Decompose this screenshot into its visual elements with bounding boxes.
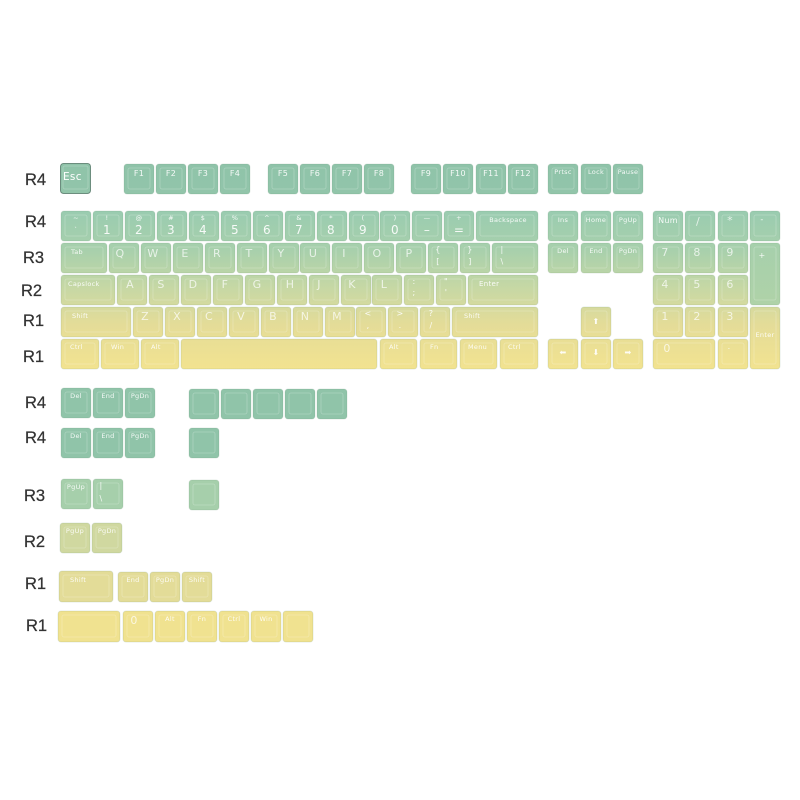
numeric keypad: 7 [661,246,669,259]
main keyboard block: A [126,278,134,291]
row labels: R4 [25,213,46,231]
main keyboard block: ; [412,288,416,297]
main keyboard block: Ctrl [70,343,83,351]
main keyboard block: > [396,309,404,318]
main keyboard block: Alt [389,343,399,351]
spare keys: R1 row one: Shift [70,576,86,584]
numeric keypad: Num [658,216,678,225]
main keyboard block: / [430,321,432,330]
main keyboard block: * [329,214,333,222]
main keyboard block: 0 [391,223,399,237]
function key row: Esc [63,171,82,183]
spare keys: R4 row two: End [101,432,115,440]
keypad plus key: + [758,251,766,260]
main keyboard block: – [424,223,430,237]
main keyboard block: ^ [264,214,270,222]
main keyboard block: Backspace [489,216,527,224]
function key row: F8 [374,169,384,178]
spare keys: R1 row one: PgDn [156,576,174,584]
main keyboard block: @ [136,214,143,222]
main keyboard block: } [467,245,473,254]
numeric keypad: 9 [726,246,734,259]
main keyboard block: H [286,278,294,291]
function key row: F11 [483,169,499,178]
spare keys: R1 row two [58,611,313,642]
main keyboard block: ? [429,309,433,318]
row labels: R1 [25,575,46,593]
main keyboard block: N [301,310,309,323]
spare keys: R1 row one [59,571,212,602]
spare keys: R1 row two: Alt [165,615,175,623]
arrow keys: ⬆ [592,317,600,326]
spare keys: R4 row two: Del [70,432,82,440]
main keyboard block: : [412,277,416,286]
main keyboard block: | [500,245,504,254]
spare keys: R1 row two: Win [259,615,273,623]
main keyboard block: 9 [359,223,367,237]
row labels: R1 [26,617,47,635]
main keyboard block: 5 [231,223,239,237]
numeric keypad: . [728,342,730,351]
navigation cluster: End [589,247,603,255]
function key row: F10 [450,169,466,178]
main keyboard block: U [309,247,317,260]
function key row: F3 [198,169,208,178]
row labels: R4 [25,394,46,412]
function key row: F2 [166,169,176,178]
row labels [21,171,47,635]
arrow keys: ⬇ [592,348,600,357]
function key row: F12 [515,169,531,178]
main keyboard block: ~ [73,214,79,222]
main keyboard block: 7 [295,223,303,237]
navigation cluster: PgDn [619,247,637,255]
spare keys: R4 row one: End [101,392,115,400]
spare keys: R4 row one: Del [70,392,82,400]
numeric keypad: 4 [661,278,669,291]
main keyboard block: R [213,247,221,260]
main keyboard block: Y [276,247,285,260]
row labels: R3 [24,487,45,505]
main keyboard block: X [173,310,181,323]
spare keys: R1 row two: 0 [130,614,138,627]
main keyboard block: L [381,278,388,291]
numeric keypad: 8 [693,246,701,259]
keypad plus key [750,243,780,305]
spare keys: R3 row: \ [100,494,102,503]
main keyboard block: I [342,247,346,260]
spare keys: R1 row two: Ctrl [228,615,240,623]
row labels: R2 [24,533,45,551]
function key row: F4 [230,169,240,178]
main keyboard block: & [296,214,302,222]
row labels: R1 [23,348,44,366]
main keyboard block: Tab [70,248,83,256]
main keyboard block: Shift [72,312,88,320]
main keyboard block: 8 [327,223,335,237]
main keyboard block: P [406,247,413,260]
row labels: R2 [21,282,42,300]
main keyboard block: + [456,214,462,222]
main keyboard block: ] [468,257,472,266]
main keyboard block: Enter [479,280,499,288]
row labels: R3 [23,249,44,267]
function key row: F5 [278,169,288,178]
main keyboard block: Shift [464,312,480,320]
navigation cluster: Home [586,216,606,224]
main keyboard block: Menu [468,343,487,351]
main keyboard block: Win [111,343,124,351]
arrow keys [548,307,643,369]
main keyboard block: E [181,247,189,260]
main keyboard block: ( [362,214,365,222]
main keyboard block: % [232,214,238,222]
spare keys: R2 row [60,523,122,553]
function key row [60,164,643,194]
function key row: Prtsc [554,168,572,176]
numeric keypad: Enter [756,331,774,339]
numeric keypad: 5 [693,278,701,291]
main keyboard block: Fn [430,343,438,351]
main keyboard block: Alt [151,343,161,351]
navigation cluster: PgUp [619,216,637,224]
spare keys: R4 row one: PgDn [131,392,149,400]
numeric keypad [653,211,780,369]
main keyboard block: C [205,310,213,323]
main keyboard block: Capslock [68,280,100,288]
navigation cluster [548,211,643,273]
main keyboard block: Q [116,247,125,260]
row labels: R4 [25,429,46,447]
main keyboard block: G [253,278,261,291]
main keyboard block: [ [436,257,440,266]
spare keys: R2 row: PgUp [66,527,84,535]
arrow keys: ⬅ [559,348,567,357]
main keyboard block: $ [201,214,205,222]
spare keys: R3 row [61,479,219,510]
main keyboard block: # [168,214,174,222]
main keyboard block: \ [500,257,504,266]
main keyboard block: 2 [135,223,143,237]
spare keys: R3 row: | [100,481,102,490]
function key row: Pause [618,168,638,176]
numeric keypad: 1 [661,310,669,323]
spare keys: R3 row: PgUp [67,483,85,491]
main keyboard block: B [269,310,277,323]
function key row: F9 [421,169,431,178]
main keyboard block: T [244,247,253,260]
function key row: F6 [310,169,320,178]
main keyboard block: Z [141,310,149,323]
numeric keypad: 2 [693,310,701,323]
main keyboard block: . [399,321,401,330]
spare keys: R4 row two [61,428,219,458]
main keyboard block: V [237,310,245,323]
main keyboard block: ` [74,226,78,234]
main keyboard block: ' [445,288,447,297]
spare keys: R1 row one: Shift [189,576,205,584]
main keyboard block: — [424,214,431,222]
numeric keypad: * [727,214,733,227]
main keyboard block: J [316,278,321,291]
numeric keypad: 3 [726,310,734,323]
function key row: F7 [342,169,352,178]
main keyboard block: 4 [199,223,207,237]
main keyboard block: W [147,247,159,260]
main keyboard block: O [373,247,382,260]
main keyboard block: { [435,245,441,254]
function key row: F1 [134,169,144,178]
navigation cluster: Del [557,247,569,255]
numeric keypad: / [696,215,700,228]
spare keys: R2 row: PgDn [98,527,116,535]
function key row: Lock [588,168,604,176]
navigation cluster: Ins [558,216,568,224]
main keyboard block: < [364,309,372,318]
main keyboard block: S [157,278,165,291]
main keyboard block: F [222,278,228,291]
main keyboard block: 6 [263,223,271,237]
main keyboard block: , [367,321,369,330]
main keyboard block: " [444,277,448,286]
row labels: R1 [23,312,44,330]
numeric keypad: 6 [726,278,734,291]
main keyboard block: M [332,310,342,323]
spare keys: R4 row one [61,388,347,419]
spare keys: R1 row two: Fn [198,615,206,623]
numeric keypad: - [760,215,764,224]
numeric keypad: 0 [663,342,671,355]
main keyboard block: ! [106,214,108,222]
main keyboard block: 1 [103,223,111,237]
spare keys: R4 row two: PgDn [131,432,149,440]
main keyboard block: ) [394,214,396,222]
main keyboard block: = [454,223,464,237]
main keyboard block: 3 [167,223,175,237]
main keyboard block: K [348,278,356,291]
arrow keys: ➡ [624,348,632,357]
main keyboard block: D [189,278,197,291]
spare keys: R1 row one: End [126,576,140,584]
row labels: R4 [25,171,46,189]
main keyboard block: Ctrl [508,343,521,351]
main keyboard block [61,211,538,369]
